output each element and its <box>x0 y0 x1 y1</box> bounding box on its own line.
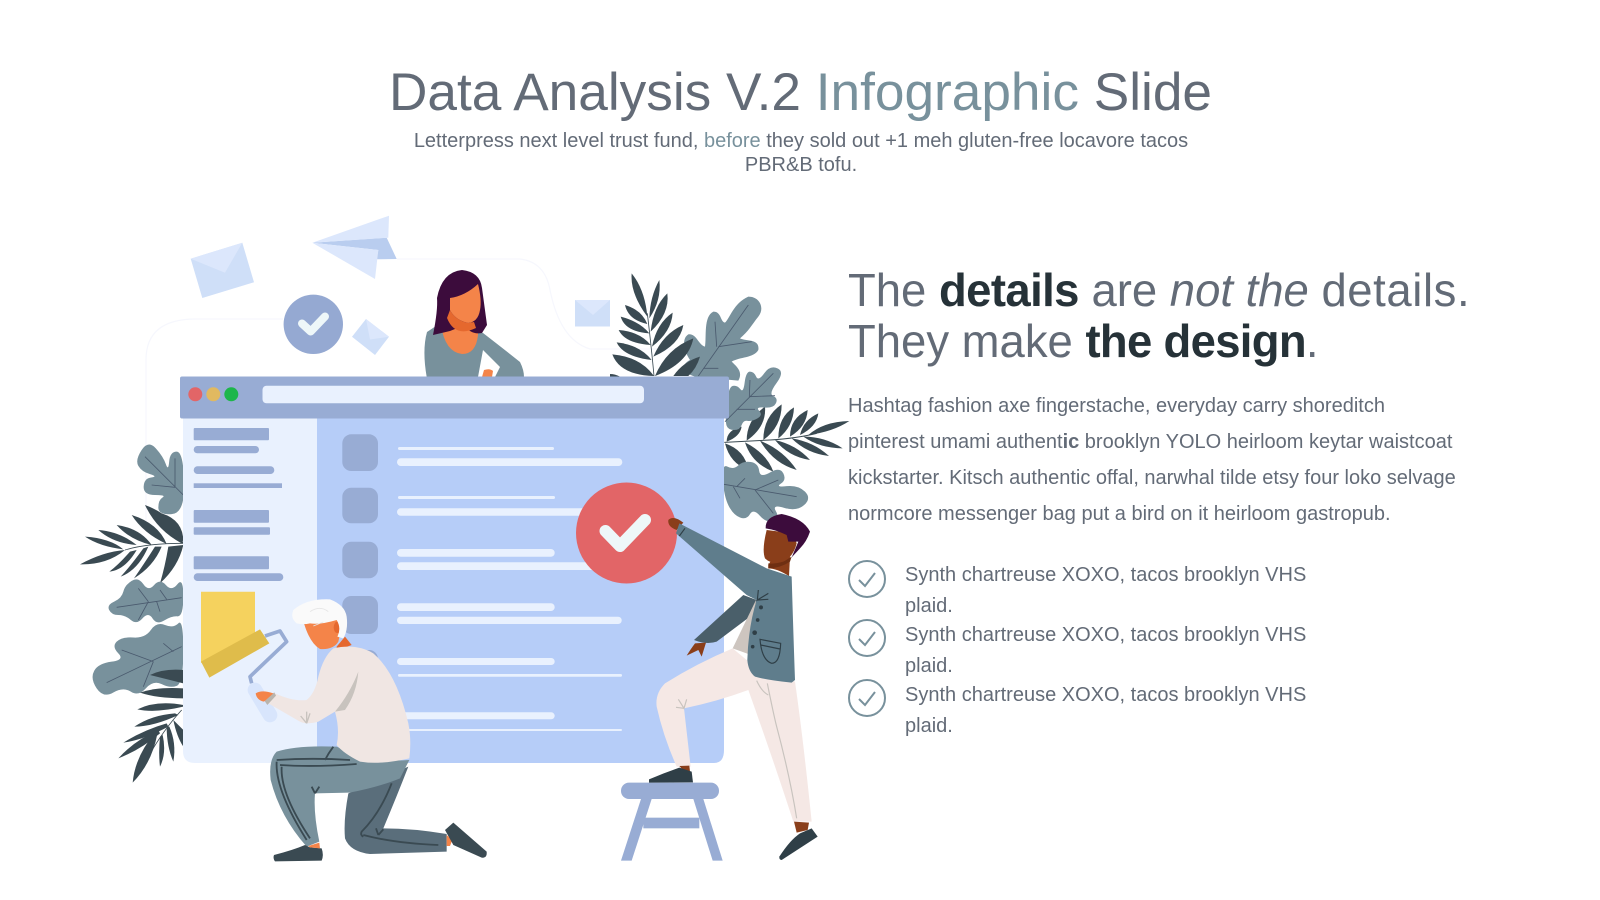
checklist item 3: Synth chartreuse XOXO, tacos brooklyn VHS <box>905 684 1306 706</box>
body paragraph: Hashtag fashion axe fingerstache, everyday carry shoreditch <box>848 395 1385 417</box>
icon: envelope right <box>575 300 610 326</box>
plant: top right oak leaves and ferns <box>610 273 849 521</box>
checklist item 2: plaid. <box>905 655 953 677</box>
figure: woman behind browser <box>424 270 524 377</box>
paint roller <box>201 629 287 715</box>
oak leaf lower <box>723 462 808 521</box>
icon: red check badge <box>576 482 677 584</box>
checklist item 2: Synth chartreuse XOXO, tacos brooklyn VHS <box>905 624 1306 646</box>
oak leaf middle left <box>109 579 183 622</box>
plant: left oak leaf top <box>137 445 184 514</box>
fern top <box>610 273 700 377</box>
icon: check circle 1 <box>848 560 886 598</box>
subtitle <box>414 130 1188 176</box>
list row lines <box>397 447 622 731</box>
figure: kneeling man with paint roller <box>201 599 487 861</box>
body paragraph: normcore messenger bag put a bird on it heirloom gastropub. <box>848 503 1391 525</box>
icon: check circle 2 <box>848 619 886 657</box>
toolbar <box>180 376 729 418</box>
oak leaf middle <box>725 367 781 430</box>
checklist item 1: Synth chartreuse XOXO, tacos brooklyn VHS <box>905 564 1306 586</box>
subtitle: PBR&B tofu. <box>745 154 857 176</box>
icon: check circle 3 <box>848 679 886 717</box>
main content panel <box>317 418 724 763</box>
body paragraph <box>848 395 1456 525</box>
oak leaf top <box>684 297 761 381</box>
checklist item 2 <box>848 619 1306 677</box>
title: Data Analysis V.2 Infographic Slide <box>389 63 1212 122</box>
sidebar panel <box>183 418 317 763</box>
figure: man stepping on stool <box>649 514 818 860</box>
checklist <box>848 560 1306 737</box>
sidebar menu bars <box>194 428 283 581</box>
icon: envelope left <box>191 243 254 298</box>
list row icons <box>342 434 378 686</box>
body paragraph: pinterest umami authentic brooklyn YOLO heirloom keytar waistcoat <box>848 431 1452 453</box>
icon: small envelope <box>352 319 389 355</box>
fern upper left <box>80 505 183 583</box>
plant: left ferns and oak leaves <box>80 505 183 783</box>
heading: the details: They make the design. <box>848 314 1319 366</box>
checklist item 1 <box>848 560 1306 617</box>
checklist item 3: plaid. <box>905 715 953 737</box>
oak leaf lower left <box>93 623 183 695</box>
checklist item 1: plaid. <box>905 595 953 617</box>
browser window <box>180 376 729 763</box>
body paragraph: kickstarter. Kitsch authentic offal, narwhal tilde etsy four loko selvage <box>848 467 1456 489</box>
heading: the details: The details are not the details. <box>848 264 1470 316</box>
checklist item 3 <box>848 679 1306 737</box>
stool <box>621 783 723 861</box>
dark fern right <box>724 404 849 472</box>
subtitle: Letterpress next level trust fund, before they sold out +1 meh gluten-free locavore tacos <box>414 130 1188 152</box>
heading: the details <box>848 264 1470 366</box>
icon: paper plane <box>312 216 397 279</box>
icon: blue check badge <box>284 295 343 354</box>
yellow painted block <box>201 592 255 663</box>
fern lower left <box>118 670 183 783</box>
